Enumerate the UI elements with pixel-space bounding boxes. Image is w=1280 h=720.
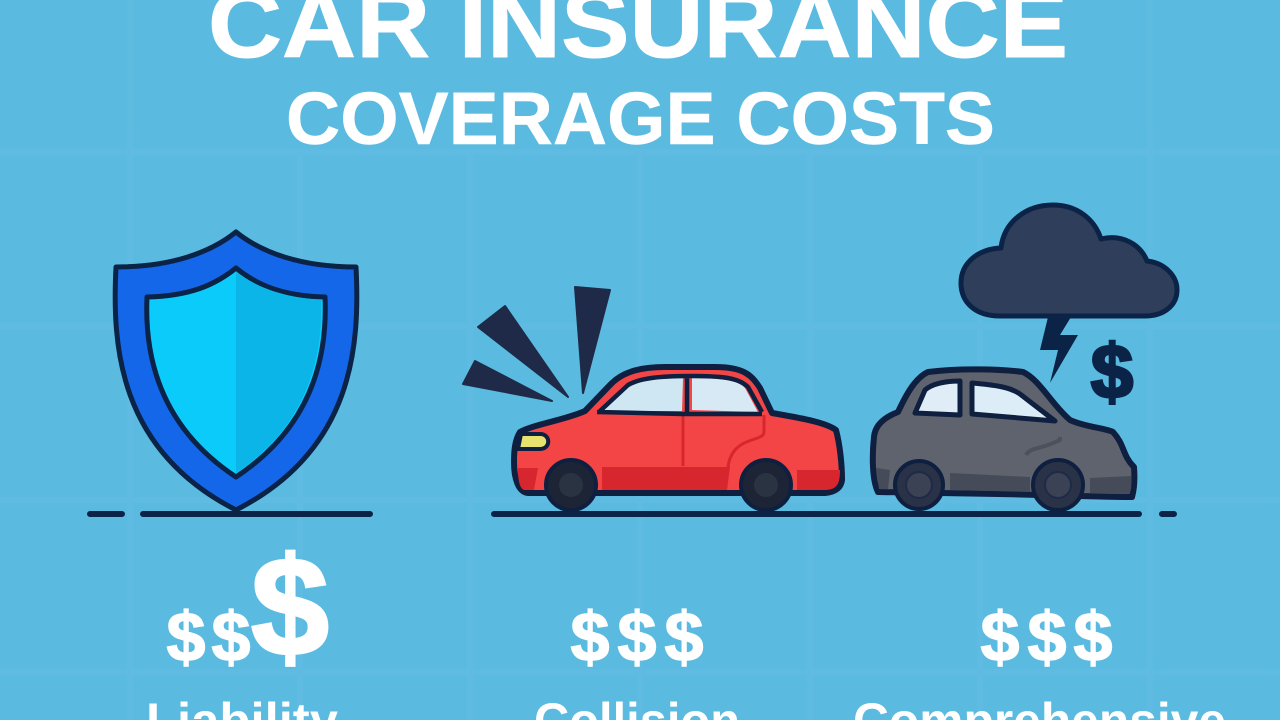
front wheel	[895, 461, 943, 509]
cost: comprehensive: $	[1028, 598, 1066, 676]
cost: collision: $	[665, 598, 703, 676]
rear wheel	[1033, 460, 1083, 510]
icon: red car	[514, 367, 842, 510]
cost: comprehensive	[981, 598, 1112, 676]
cost: comprehensive: $	[1074, 598, 1112, 676]
front wheel	[546, 460, 596, 510]
icon: gray car	[873, 369, 1134, 510]
cost: comprehensive: $	[981, 598, 1019, 676]
cost: liability: $	[167, 598, 205, 676]
cost: liability: $	[212, 598, 250, 676]
cost: collision: $	[571, 598, 609, 676]
icon: shield	[115, 232, 357, 510]
cost: collision	[571, 598, 703, 676]
icon: storm cloud	[961, 205, 1177, 316]
icon: lightning bolt	[1040, 317, 1078, 383]
icon: impact burst	[463, 287, 610, 401]
cost: liability: $	[251, 528, 329, 685]
cost: collision: $	[618, 598, 656, 676]
ground line	[90, 511, 1174, 517]
cost: liability	[167, 528, 329, 685]
rear wheel	[741, 460, 791, 510]
title line 2: COVERAGE COSTS	[286, 77, 995, 160]
icon: dark dollar sign: $	[1091, 330, 1133, 415]
title	[208, 0, 1068, 160]
